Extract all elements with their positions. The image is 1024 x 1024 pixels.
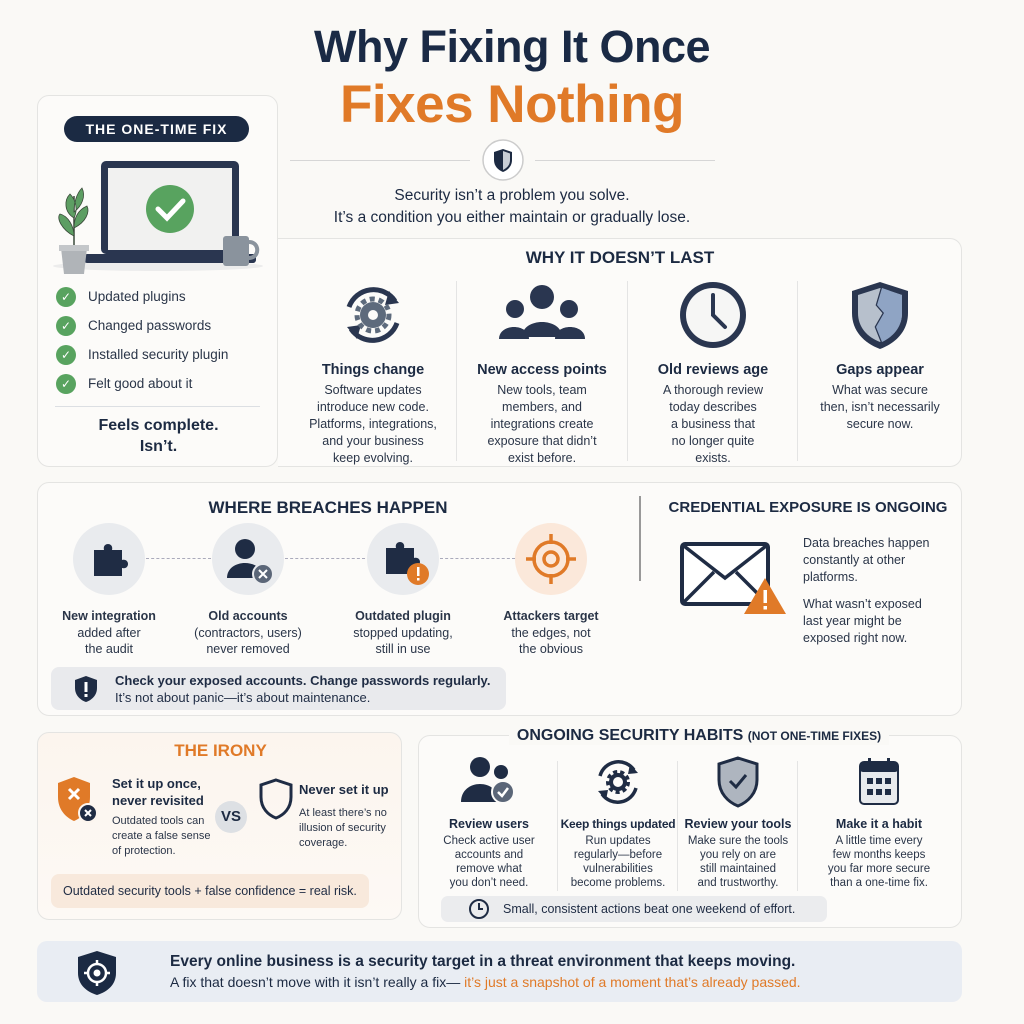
habit: make it a habit: Make it a habit	[836, 817, 922, 831]
icon: broken shield	[58, 777, 96, 821]
habit: review your tools: and trustworthy.	[698, 877, 778, 889]
column: gaps appear: secure now.	[847, 417, 913, 431]
text: set it up once: Set it up once,	[112, 776, 201, 791]
title: Why Fixing It Once	[314, 21, 710, 72]
text: never set it up: Never set it up	[299, 782, 389, 797]
text: set it up once: of protection.	[112, 845, 176, 857]
subtitle: Security isn’t a problem you solve.	[394, 187, 630, 204]
panel: one-time fix	[37, 95, 278, 467]
column: new access points: exposure that didn’t	[487, 434, 597, 448]
habit: review users: remove what	[456, 863, 522, 875]
text: credential exposure: platforms.	[803, 570, 858, 584]
conclusion	[98, 417, 219, 455]
icon: empty shield	[260, 778, 292, 820]
habit: review users: you don’t need.	[450, 877, 528, 889]
heading: credential exposure: CREDENTIAL EXPOSURE IS ONGOING	[669, 499, 947, 516]
subtitle	[334, 187, 690, 226]
text: set it up once: create a false sense	[112, 830, 210, 842]
column: old reviews age: exists.	[695, 451, 731, 465]
pill label	[64, 116, 249, 142]
vs badge: VS	[221, 808, 241, 825]
checklist: Updated plugins	[88, 289, 186, 304]
column: things change: Software updates	[324, 383, 422, 397]
text: conclusion: Every online business is a security target in a threat environment that keeps moving.	[170, 953, 795, 970]
habit: review users	[443, 757, 535, 889]
column: things change: and your business	[322, 434, 424, 448]
column: old reviews age: no longer quite	[672, 434, 754, 448]
column: old reviews age: A thorough review	[663, 383, 763, 397]
callout: real risk: Outdated security tools + false confidence = real risk.	[63, 884, 357, 898]
text: credential exposure: last year might be	[803, 614, 902, 628]
breach: outdated plugin	[353, 523, 453, 656]
title: Fixes Nothing	[340, 75, 684, 134]
dashed connectors	[146, 558, 211, 559]
breach: attackers target edges: the obvious	[519, 642, 583, 656]
habit: review your tools: Review your tools	[684, 817, 791, 831]
breach: outdated plugin: stopped updating,	[353, 626, 453, 640]
text: credential exposure: Data breaches happen	[803, 536, 929, 550]
text: never set it up: illusion of security	[299, 822, 386, 834]
text: conclusion: A fix that doesn’t move with it isn’t really a fix— it’s just a snapshot of a moment that’s already passed.	[170, 974, 801, 990]
banner: conclusion	[37, 941, 962, 1002]
text: never set it up: coverage.	[299, 837, 347, 849]
title	[314, 21, 710, 134]
pill label: THE ONE-TIME FIX	[86, 121, 228, 137]
column: things change: Things change	[322, 362, 424, 378]
text: credential exposure: What wasn’t exposed	[803, 597, 922, 611]
vs badge	[215, 801, 247, 833]
habit: review your tools: you rely on are	[700, 849, 776, 861]
breach: new integration	[62, 523, 156, 656]
column: new access points: exist before.	[508, 451, 576, 465]
icon: envelope warning	[680, 542, 786, 614]
checklist	[56, 287, 228, 394]
habit: make it a habit: than a one-time fix.	[830, 877, 928, 889]
callout: check accounts	[51, 667, 506, 710]
habit: review users: Review users	[449, 817, 529, 831]
checklist: Felt good about it	[88, 376, 192, 391]
breach: outdated plugin: Outdated plugin	[355, 609, 451, 623]
breach: attackers target edges	[503, 523, 599, 656]
callout: real risk	[51, 874, 369, 908]
checklist: Changed passwords	[88, 318, 211, 333]
text: credential exposure	[803, 536, 929, 645]
habit: make it a habit: A little time every	[836, 835, 922, 847]
column: gaps appear: What was secure	[832, 383, 928, 397]
habit: review your tools	[684, 756, 791, 889]
habit: review users: Check active user	[443, 835, 535, 847]
column: things change: Platforms, integrations,	[309, 417, 437, 431]
column: things change: introduce new code.	[317, 400, 429, 414]
heading: THE IRONY	[174, 741, 267, 760]
checklist: ✓	[61, 348, 71, 362]
column: old reviews age: today describes	[669, 400, 757, 414]
habit: review users: accounts and	[455, 849, 523, 861]
text: never set it up	[299, 782, 389, 849]
callout: check accounts: Check your exposed accounts. Change passwords regularly.	[115, 673, 490, 688]
checklist: ✓	[61, 318, 71, 332]
column: new access points: integrations create	[491, 417, 593, 431]
breach: old accounts: (contractors, users)	[194, 626, 302, 640]
callout: small consistent actions	[441, 896, 827, 922]
checklist: ✓	[61, 290, 71, 304]
illustration: laptop	[53, 161, 263, 274]
habit: review your tools: still maintained	[700, 863, 776, 875]
panel: the irony	[37, 732, 402, 920]
panel: where breaches happen	[37, 482, 962, 716]
column: new access points: New access points	[477, 362, 607, 378]
text: never set it up: At least there’s no	[299, 807, 387, 819]
column: old reviews age: Old reviews age	[658, 362, 768, 378]
habit: keep things updated: Run updates	[585, 835, 651, 847]
breach: outdated plugin: still in use	[376, 642, 430, 656]
text: credential exposure: exposed right now.	[803, 631, 907, 645]
column: gaps appear: Gaps appear	[836, 362, 924, 378]
heading: ONGOING SECURITY HABITS (NOT ONE-TIME FIXES)	[517, 727, 881, 744]
callout: small consistent actions: Small, consistent actions beat one weekend of effort.	[503, 902, 795, 916]
checklist: ✓	[61, 376, 71, 390]
breach: old accounts: Old accounts	[208, 609, 288, 623]
habit: make it a habit: few months keeps	[833, 849, 925, 861]
breach: old accounts	[194, 523, 302, 656]
text: conclusion	[170, 953, 801, 990]
habit: make it a habit: you far more secure	[828, 863, 930, 875]
column: gaps appear	[820, 282, 940, 431]
breach: new integration: added after	[77, 626, 141, 640]
text: credential exposure: constantly at other	[803, 553, 905, 567]
panel: ongoing habits	[418, 735, 962, 928]
icon: target shield	[78, 951, 116, 995]
icon: title shield	[290, 139, 715, 181]
column: new access points	[477, 285, 607, 465]
habit: keep things updated: vulnerabilities	[583, 863, 653, 875]
habit: make it a habit	[828, 758, 930, 889]
callout: check accounts: It’s not about panic—it’s about maintenance.	[115, 690, 370, 705]
checklist: Installed security plugin	[88, 347, 228, 362]
breach: new integration: the audit	[85, 642, 133, 656]
breach: attackers target edges: Attackers target	[503, 609, 599, 623]
habit: keep things updated: Keep things updated	[561, 817, 675, 831]
heading: WHERE BREACHES HAPPEN	[208, 498, 447, 517]
breach: new integration: New integration	[62, 609, 156, 623]
column: new access points: New tools, team	[497, 383, 587, 397]
text: set it up once: Outdated tools can	[112, 815, 204, 827]
breach: attackers target edges: the edges, not	[511, 626, 591, 640]
panel: why it doesn't last	[278, 238, 962, 467]
text: set it up once	[112, 776, 210, 857]
subtitle: It’s a condition you either maintain or gradually lose.	[334, 209, 690, 226]
breach: old accounts: never removed	[206, 642, 290, 656]
column: new access points: members, and	[502, 400, 582, 414]
heading: WHY IT DOESN’T LAST	[526, 248, 714, 267]
column: things change	[309, 287, 437, 465]
column: old reviews age	[658, 282, 768, 465]
conclusion: Feels complete.	[98, 417, 219, 434]
conclusion: Isn’t.	[140, 438, 177, 455]
column: gaps appear: then, isn’t necessarily	[820, 400, 940, 414]
column: old reviews age: a business that	[671, 417, 755, 431]
habit: keep things updated: become problems.	[571, 877, 665, 889]
habit: keep things updated: regularly—before	[574, 849, 662, 861]
habit: review your tools: Make sure the tools	[688, 835, 788, 847]
column: things change: keep evolving.	[333, 451, 413, 465]
text: set it up once: never revisited	[112, 793, 204, 808]
habit: keep things updated	[561, 760, 675, 889]
